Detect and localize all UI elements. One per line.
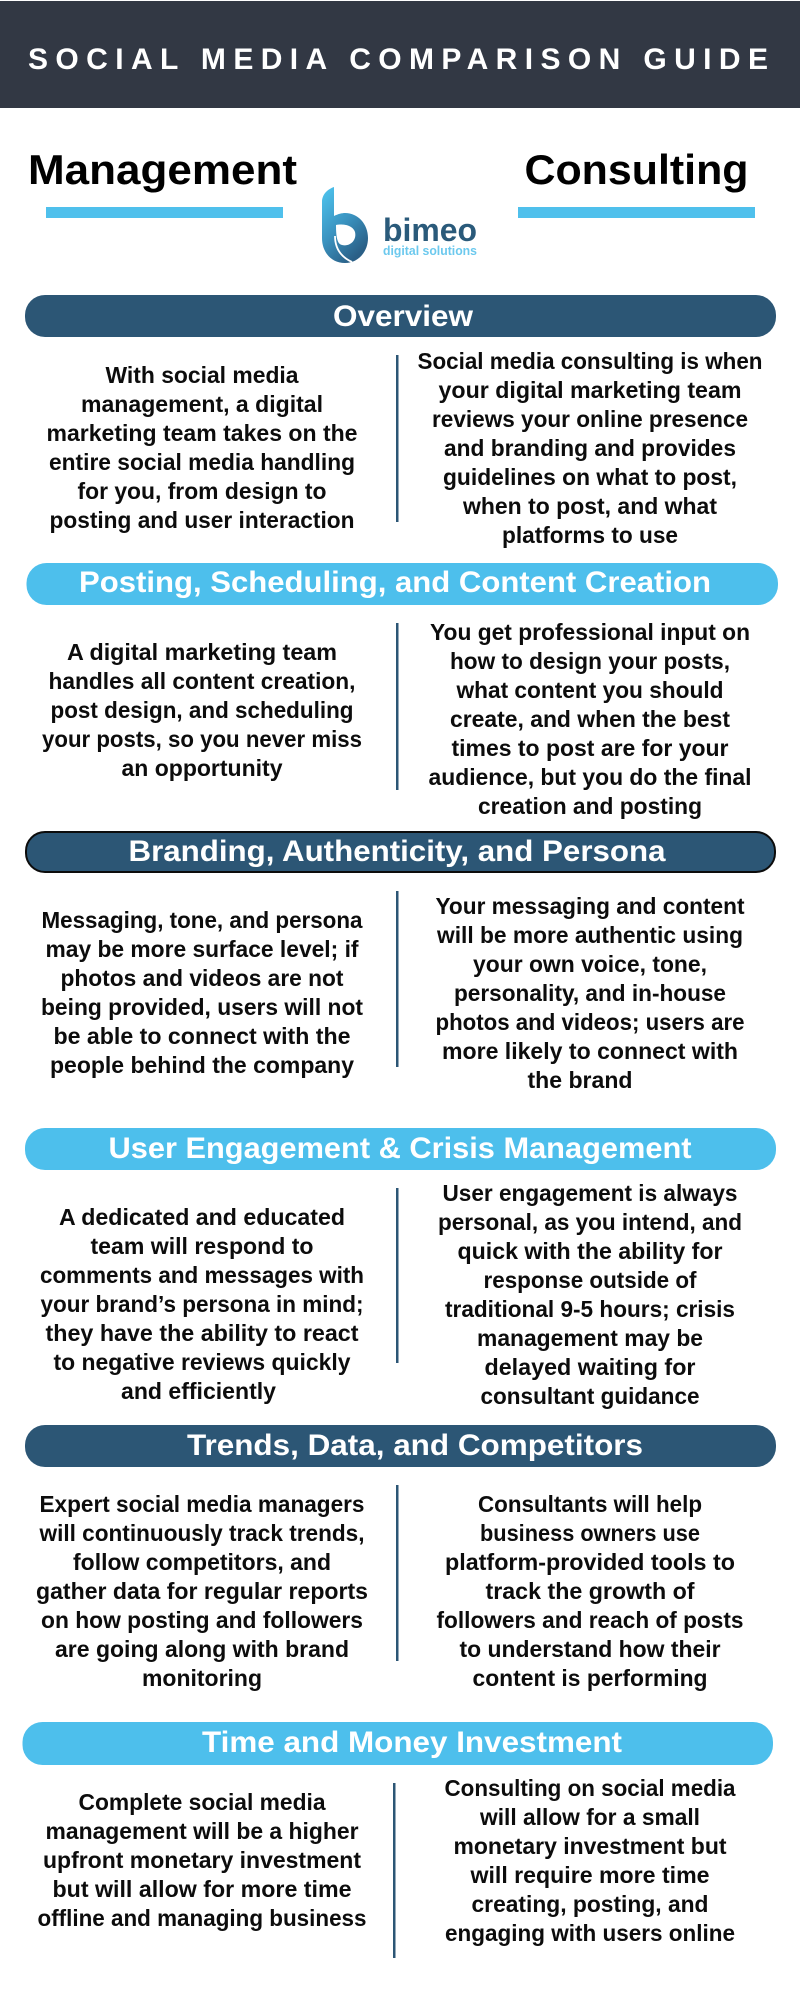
text: overview consulting: Social media consulting is when xyxy=(418,348,762,374)
text: time consulting: monetary investment but xyxy=(454,1833,727,1859)
heading: user engagement xyxy=(25,1128,776,1170)
text: branding consulting: Your messaging and content xyxy=(436,893,745,919)
heading: overview xyxy=(25,295,776,337)
text: overview management xyxy=(46,362,358,533)
text: time consulting: will allow for a small xyxy=(479,1804,700,1830)
text: user engagement management: team will respond to xyxy=(90,1233,314,1259)
panel: overview xyxy=(25,295,776,548)
text: overview consulting: when to post, and what xyxy=(462,493,717,519)
text: posting management: post design, and scheduling xyxy=(50,697,354,723)
text: posting management xyxy=(42,639,362,781)
text: branding management: may be more surface level; if xyxy=(46,936,359,962)
text: user engagement management: A dedicated and educated xyxy=(59,1204,345,1230)
heading: overview: Overview xyxy=(333,300,474,333)
text: branding management xyxy=(41,907,363,1078)
text: user engagement consulting: personal, as you intend, and xyxy=(438,1209,742,1235)
column heading: Consulting xyxy=(518,146,755,218)
text: time management: offline and managing business xyxy=(38,1905,366,1931)
panel: time and money investment xyxy=(22,1722,773,1958)
text: user engagement consulting: delayed waiting for xyxy=(484,1354,696,1380)
text: branding consulting: personality, and in-house xyxy=(454,980,726,1006)
text: trends management: follow competitors, and xyxy=(73,1549,331,1575)
header banner xyxy=(0,1,800,108)
text: trends consulting: platform-provided tools to xyxy=(445,1549,735,1575)
logo: bimeo digital solutions: bimeo xyxy=(383,212,477,248)
text: user engagement management: and efficiently xyxy=(121,1378,276,1404)
column heading: Management: Management xyxy=(28,146,297,193)
logo: bimeo digital solutions: digital solutions xyxy=(383,243,477,258)
text: user engagement consulting: response outside of xyxy=(484,1267,697,1293)
text: trends management: Expert social media managers xyxy=(40,1491,364,1517)
text: branding consulting: more likely to connect with xyxy=(442,1038,738,1064)
text: posting consulting: what content you should xyxy=(456,677,724,703)
text: overview consulting: and branding and provides xyxy=(444,435,736,461)
heading: branding: Branding, Authenticity, and Persona xyxy=(128,835,666,868)
text: user engagement consulting: User engagement is always xyxy=(442,1180,738,1206)
text: posting consulting: creation and posting xyxy=(478,793,702,819)
text: trends management: on how posting and followers xyxy=(41,1607,363,1633)
panel: user engagement and crisis management xyxy=(25,1128,776,1409)
panel: trends, data, and competitors xyxy=(25,1425,776,1691)
text: trends management: will continuously track trends, xyxy=(39,1520,364,1546)
text: overview management: for you, from design to xyxy=(78,478,326,504)
text: posting consulting: times to post are for your xyxy=(452,735,729,761)
text: time consulting: creating, posting, and xyxy=(472,1891,708,1917)
text: trends consulting: Consultants will help xyxy=(478,1491,702,1517)
text: posting management: A digital marketing team xyxy=(67,639,337,665)
text: user engagement management: comments and messages with xyxy=(40,1262,364,1288)
text: trends management: monitoring xyxy=(142,1665,262,1691)
text: branding management: Messaging, tone, and persona xyxy=(42,907,363,933)
text: branding consulting: the brand xyxy=(528,1067,632,1093)
text: posting management: an opportunity xyxy=(122,755,283,781)
text: trends management: are going along with brand xyxy=(55,1636,349,1662)
heading: posting xyxy=(26,563,778,605)
text: overview consulting: guidelines on what to post, xyxy=(443,464,737,490)
text: user engagement consulting: consultant guidance xyxy=(480,1383,700,1409)
heading: trends xyxy=(25,1425,776,1467)
text: branding management: being provided, users will not xyxy=(41,994,363,1020)
text: time consulting: engaging with users online xyxy=(445,1920,735,1946)
text: overview management: With social media xyxy=(106,362,299,388)
text: trends consulting: content is performing xyxy=(472,1665,708,1691)
text: trends management xyxy=(36,1491,368,1691)
heading: time and money: Time and Money Investment xyxy=(202,1726,622,1759)
text: posting management: handles all content creation, xyxy=(48,668,356,694)
heading: trends: Trends, Data, and Competitors xyxy=(187,1429,643,1462)
text: branding consulting xyxy=(436,893,745,1093)
text: posting consulting: audience, but you do the final xyxy=(428,764,752,790)
text: user engagement consulting: traditional 9-5 hours; crisis xyxy=(445,1296,735,1322)
text: posting management: your posts, so you never miss xyxy=(42,726,362,752)
text: time management: upfront monetary investment xyxy=(43,1847,361,1873)
text: branding management: be able to connect with the xyxy=(54,1023,350,1049)
text: posting consulting: create, and when the best xyxy=(450,706,730,732)
text: time management xyxy=(38,1789,366,1931)
text: branding management: people behind the company xyxy=(50,1052,354,1078)
text: time consulting: will require more time xyxy=(469,1862,710,1888)
panel: branding, authenticity, and persona xyxy=(26,832,775,1093)
text: overview management: entire social media handling xyxy=(49,449,355,475)
text: overview consulting: reviews your online presence xyxy=(432,406,748,432)
text: time management: but will allow for more time xyxy=(52,1876,352,1902)
text: time consulting xyxy=(444,1775,736,1946)
text: posting consulting: You get professional input on xyxy=(430,619,750,645)
text: overview consulting xyxy=(418,348,762,548)
text: branding consulting: your own voice, tone, xyxy=(473,951,707,977)
text: posting consulting xyxy=(428,619,752,819)
text: user engagement management: they have the ability to react xyxy=(46,1320,359,1346)
text: branding management: photos and videos are not xyxy=(60,965,344,991)
text: user engagement management: to negative reviews quickly xyxy=(54,1349,351,1375)
text: time management: Complete social media xyxy=(78,1789,326,1815)
text: user engagement management: your brand’s persona in mind; xyxy=(40,1291,364,1317)
heading: posting: Posting, Scheduling, and Content Creation xyxy=(79,566,711,599)
text: posting consulting: how to design your posts, xyxy=(450,648,730,674)
text: trends consulting: followers and reach of posts xyxy=(436,1607,744,1633)
text: trends consulting: business owners use xyxy=(480,1520,700,1546)
text: user engagement consulting: quick with the ability for xyxy=(458,1238,723,1264)
text: user engagement management xyxy=(40,1204,364,1404)
text: trends consulting xyxy=(436,1491,744,1691)
text: branding consulting: will be more authentic using xyxy=(436,922,743,948)
text: trends consulting: to understand how their xyxy=(460,1636,721,1662)
logo: bimeo digital solutions xyxy=(322,187,477,263)
text: overview management: management, a digital xyxy=(81,391,323,417)
column heading: Consulting: Consulting xyxy=(524,146,748,193)
text: overview management: marketing team takes on the xyxy=(46,420,358,446)
text: overview consulting: your digital marketing team xyxy=(438,377,742,403)
text: overview consulting: platforms to use xyxy=(502,522,678,548)
text: time consulting: Consulting on social media xyxy=(444,1775,736,1801)
text: trends consulting: track the growth of xyxy=(486,1578,695,1604)
text: overview management: posting and user interaction xyxy=(50,507,354,533)
text: branding consulting: photos and videos; users are xyxy=(436,1009,744,1035)
column heading: Management xyxy=(28,146,297,218)
heading: branding xyxy=(26,832,775,872)
text: user engagement consulting xyxy=(438,1180,742,1409)
text: time management: management will be a higher xyxy=(46,1818,359,1844)
title: SOCIAL MEDIA COMPARISON GUIDE xyxy=(28,43,768,76)
text: trends management: gather data for regular reports xyxy=(36,1578,368,1604)
panel: posting, scheduling, and content creation xyxy=(26,563,778,819)
text: user engagement consulting: management may be xyxy=(477,1325,703,1351)
heading: user engagement: User Engagement & Crisis Management xyxy=(108,1132,692,1165)
heading: time and money xyxy=(22,1722,773,1765)
